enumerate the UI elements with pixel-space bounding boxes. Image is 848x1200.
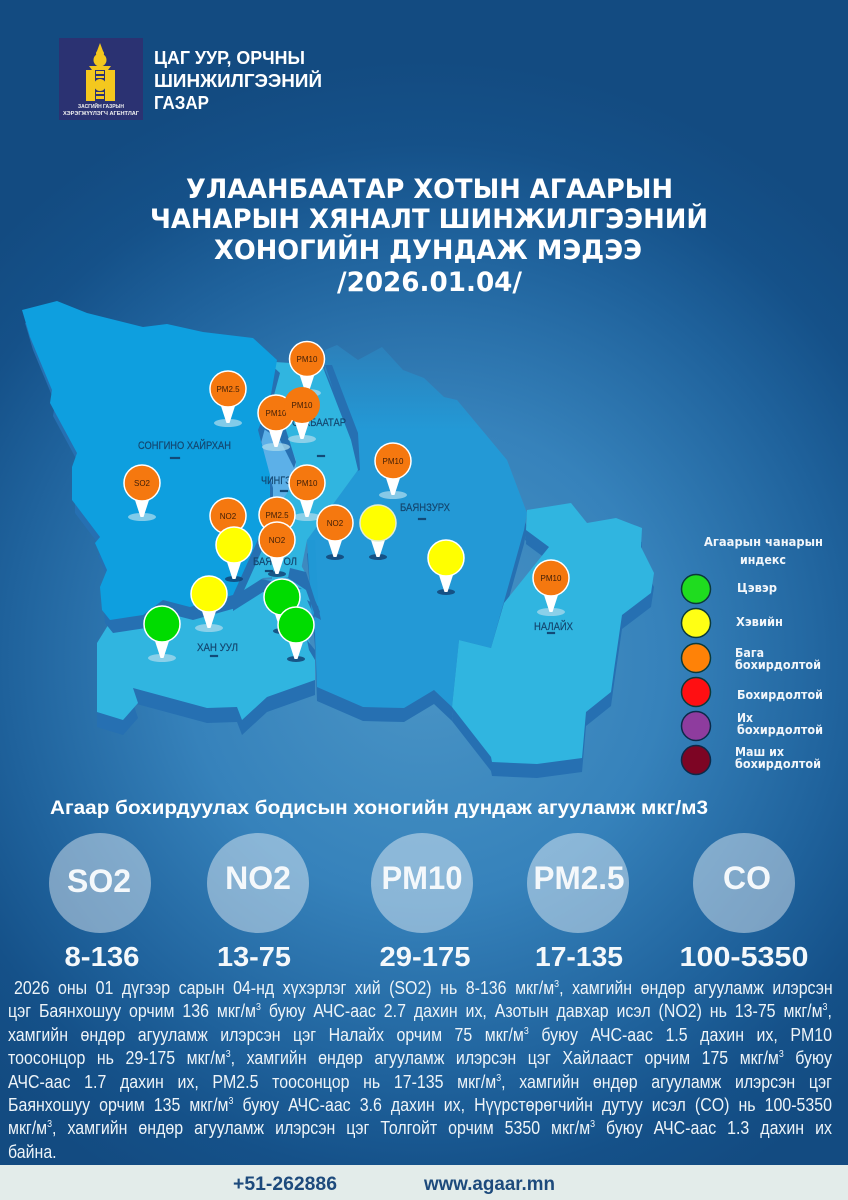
- district labels: ХАН УУЛ: [197, 642, 238, 654]
- pollutant: CO: 100-5350: [680, 941, 808, 972]
- pin: PM2.5 centre: [259, 497, 295, 552]
- pin: green lower: [278, 607, 314, 662]
- legend: very high pollution: бохирдолтой: [735, 756, 821, 771]
- organisation name: ГАЗАР: [154, 93, 209, 113]
- body text: хамгийн өндөр агууламж илэрсэн цэг Налайх орчим 75 мкг/м3 буюу АЧС-аас 1.5 дахин их, PM10: [8, 1025, 832, 1045]
- pollutant: NO2: NO2: [225, 860, 291, 896]
- district map: [22, 301, 654, 778]
- legend: polluted: [682, 678, 823, 706]
- legend: very high pollution: [682, 744, 821, 774]
- pin: PM10 Nalaikh: [533, 560, 569, 616]
- footer band: [0, 1165, 848, 1200]
- pollutant: SO2: [49, 833, 151, 972]
- organisation name: ЦАГ УУР, ОРЧНЫ: [154, 48, 305, 68]
- title: ХОНОГИЙН ДУНДАЖ МЭДЭЭ: [214, 234, 642, 266]
- district: Sukhbaatar: [262, 362, 360, 580]
- pollutant: CO: [680, 833, 808, 972]
- website: www.agaar.mn: [423, 1174, 555, 1195]
- district: Khan Uul: [97, 577, 321, 735]
- legend: low pollution: бохирдолтой: [735, 657, 821, 672]
- pollutant: CO: CO: [723, 860, 771, 896]
- pin: PM10 Bayanzurkh: [375, 443, 411, 499]
- legend: low pollution: Бага: [735, 645, 764, 660]
- legend: polluted: Бохирдолтой: [737, 687, 823, 702]
- pin: PM2.5 centre: PM2.5: [265, 511, 289, 520]
- pin: PM2.5 Songino: PM2.5: [216, 385, 240, 394]
- legend: high pollution: Их: [737, 710, 753, 725]
- legend title: Агаарын чанарын: [704, 534, 823, 549]
- legend: clean: Цэвэр: [737, 580, 777, 595]
- pin: PM10 Chingeltei: [289, 465, 325, 521]
- pin: PM10 right: PM10: [292, 401, 313, 410]
- organisation name: ШИНЖИЛГЭЭНИЙ: [154, 70, 322, 91]
- title: /2026.01.04/: [337, 267, 522, 298]
- pin: PM10 Chingeltei: PM10: [297, 479, 318, 488]
- district labels: СҮХБААТАР: [292, 417, 346, 429]
- pin: PM10 north: PM10: [297, 355, 318, 364]
- body text: мкг/м3, хамгийн өндөр агууламж илэрсэн цэг Толгойт орчим 5350 мкг/м3 буюу АЧС-аас 1.3 дахин их: [8, 1118, 832, 1138]
- body text: байна.: [8, 1142, 57, 1162]
- pin: PM10 Nalaikh: PM10: [541, 574, 562, 583]
- pin: NO2 east: [317, 505, 353, 560]
- pin: NO2 centre: [259, 522, 295, 577]
- logo: ХЭРЭГЖҮҮЛЭГЧ АГЕНТЛАГ: [63, 111, 139, 117]
- pin: PM10 right: [284, 387, 320, 443]
- pollutant: PM10: 29-175: [380, 941, 470, 972]
- body text: АЧС-аас 1.7 дахин их, PM2.5 тоосонцор нь 17-135 мкг/м3, хамгийн өндөр агууламж илэрсэн цэг: [8, 1072, 832, 1092]
- legend title: индекс: [740, 552, 786, 567]
- legend title: [704, 534, 823, 567]
- district labels: НАЛАЙХ: [534, 620, 574, 633]
- pin: green west: [144, 606, 180, 662]
- pin: PM10 left: PM10: [266, 409, 287, 418]
- pollutant: SO2: 8-136: [64, 941, 140, 972]
- pollutant: NO2: [207, 833, 309, 972]
- pin: NO2 centre: NO2: [269, 536, 286, 545]
- logo: [59, 38, 143, 120]
- pin: NO2 west: NO2: [220, 512, 237, 521]
- title: УЛААНБААТАР ХОТЫН АГААРЫН: [186, 174, 673, 205]
- pin: PM10 north: [290, 342, 324, 397]
- pin: PM2.5 Songino: [210, 371, 246, 427]
- pollutant: PM10: PM10: [382, 860, 462, 896]
- body text: [8, 978, 833, 1162]
- phone number: +51-262886: [233, 1174, 337, 1195]
- title: [150, 174, 708, 298]
- pin: SO2: SO2: [134, 479, 151, 488]
- body text: цэг Баянхошуу орчим 136 мкг/м3 буюу АЧС-аас 2.7 дахин их, Азотын давхар исэл (NO2) нь 13-75 мкг/м3,: [8, 1001, 832, 1021]
- pin: NO2 east: NO2: [327, 519, 344, 528]
- logo: ЗАСГИЙН ГАЗРЫН: [78, 102, 124, 110]
- pin: SO2: [124, 465, 160, 521]
- pin: yellow Bayanzurkh: [428, 540, 464, 595]
- pollutant: PM2.5: 17-135: [535, 941, 623, 972]
- legend: normal: [682, 608, 783, 638]
- district labels: БАЯНЗУРХ: [400, 502, 451, 514]
- pin: PM10 Bayanzurkh: PM10: [383, 457, 404, 466]
- legend: [682, 534, 823, 774]
- legend: low pollution: [682, 644, 821, 672]
- section heading: Агаар бохирдуулах бодисын хоногийн дундаж агууламж мкг/м3: [50, 797, 708, 819]
- legend: normal: Хэвийн: [736, 614, 783, 629]
- legend: very high pollution: Маш их: [735, 744, 784, 759]
- district labels: БАЯНГОЛ: [253, 556, 297, 568]
- district: Bayanzurkh: [307, 345, 527, 722]
- district labels: ЧИНГЭЛТЭЙ: [261, 474, 316, 487]
- pin: NO2 west: [210, 498, 246, 553]
- organisation name: [154, 48, 322, 113]
- pin: yellow Khan Uul: [191, 576, 227, 632]
- pin: yellow east: [360, 505, 396, 560]
- pin: yellow centre: [216, 527, 252, 582]
- district: Songino Khairkhan: [22, 301, 280, 633]
- pin: PM10 left: [258, 395, 294, 451]
- pollutant: PM10: [371, 833, 473, 972]
- district labels: [138, 417, 574, 657]
- district labels: СОНГИНО ХАЙРХАН: [138, 439, 231, 452]
- pollutant: NO2: 13-75: [217, 941, 291, 972]
- legend: high pollution: бохирдолтой: [737, 722, 823, 737]
- legend: clean: [682, 574, 777, 604]
- pollutant: PM2.5: PM2.5: [534, 860, 624, 896]
- legend: high pollution: [682, 710, 823, 740]
- map pins: [124, 342, 569, 662]
- district: Nalaikh: [452, 503, 654, 778]
- title: ЧАНАРЫН ХЯНАЛТ ШИНЖИЛГЭЭНИЙ: [150, 203, 708, 235]
- district: Chingeltei: [258, 427, 296, 515]
- pin: green upper: [264, 579, 300, 634]
- body text: 2026 оны 01 дүгээр сарын 04-нд хүхэрлэг хий (SO2) нь 8-136 мкг/м3, хамгийн өндөр агууламж илэрсэн: [14, 978, 833, 998]
- pollutant: SO2: SO2: [67, 863, 131, 899]
- body text: Баянхошуу орчим 135 мкг/м3 буюу АЧС-аас 3.6 дахин их, Нүүрстөрөгчийн дутуу исэл (CO) нь 100-5350: [8, 1095, 832, 1115]
- district: Bayangol: [233, 510, 320, 618]
- pollutant: PM2.5: [527, 833, 629, 972]
- body text: тоосонцор нь 29-175 мкг/м3, хамгийн өндөр агууламж илэрсэн цэг Хайлааст орчим 175 мкг/м3 буюу: [8, 1048, 832, 1068]
